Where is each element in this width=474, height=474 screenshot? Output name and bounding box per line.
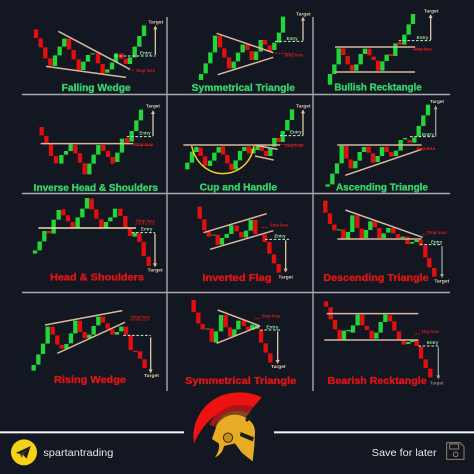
trend lines: rising wedge (45, 311, 125, 353)
target arrow: descending triangle: Target (434, 279, 450, 284)
target arrow: bearish rectangle: Stop loss (421, 329, 440, 334)
target arrow: rising wedge: Target (144, 373, 160, 378)
heading: bearish rectangle: Bearish Recktangle (328, 376, 427, 387)
target arrow: cup and handle: Entry (290, 129, 302, 134)
heading: rising wedge: Rising Wedge (54, 375, 126, 386)
target arrow: falling wedge (115, 19, 164, 73)
target arrow: bearish symmetrical triangle: Target (271, 364, 286, 369)
heading: inverse head and shoulders: Inverse Head & Shoulders (34, 183, 158, 194)
candles: inverted flag (200, 207, 279, 273)
candles: bearish symmetrical triangle (194, 300, 270, 363)
footer (0, 392, 474, 465)
target arrow: inverse head and shoulders (127, 104, 161, 147)
heading: falling wedge: Falling Wedge (62, 83, 131, 94)
target arrow: inverted flag: Stop loss (270, 223, 289, 228)
trend lines: ascending triangle (337, 145, 422, 175)
candles: rising wedge (34, 317, 145, 371)
target arrow: bullish rectangle: Entry (417, 35, 429, 40)
target arrow: inverse head and shoulders: Entry (139, 131, 151, 136)
target arrow: bearish symmetrical triangle (255, 313, 286, 369)
candles: inverse head and shoulders (42, 110, 141, 174)
account name: spartantrading (43, 448, 114, 459)
panel: bullish symmetrical triangle (192, 11, 311, 94)
candles: head and shoulders (35, 198, 149, 266)
trend lines: bearish rectangle (324, 314, 418, 340)
heading: head and shoulders: Head & Shoulders (50, 272, 144, 283)
panel: bearish symmetrical triangle (185, 300, 297, 387)
target arrow: cup and handle: Stop loss (285, 143, 304, 148)
target arrow: head and shoulders: Stop loss (136, 219, 156, 224)
candles: bearish rectangle (326, 301, 430, 377)
target arrow: bullish rectangle: Stop loss (414, 47, 432, 52)
heading: cup and handle: Cup and Handle (200, 183, 277, 194)
heading: bearish symmetrical triangle: Symmetrical Triangle (185, 376, 297, 387)
target arrow: ascending triangle: Entry (422, 132, 435, 137)
target arrow: inverted flag (262, 223, 294, 280)
panel: inverted flag (200, 207, 294, 284)
icon: floppy disk (447, 443, 464, 459)
target arrow: ascending triangle (410, 99, 445, 151)
target arrow: ascending triangle: Target (430, 99, 445, 104)
panel: cup and handle (183, 104, 311, 194)
trend lines: inverted flag (203, 214, 273, 249)
trend lines: bullish rectangle (335, 47, 415, 72)
neckline: inverse head and shoulders (41, 141, 133, 146)
target arrow: head and shoulders (132, 219, 163, 272)
footer rule right (274, 431, 474, 433)
candles: cup and handle (187, 109, 292, 170)
cup curve (192, 146, 254, 174)
heading: descending triangle: Descending Triangle (323, 273, 429, 284)
target arrow: bearish rectangle: Target (430, 381, 444, 386)
target arrow: descending triangle: Entry (431, 239, 443, 244)
target arrow: bearish symmetrical triangle: Stop loss (262, 313, 281, 318)
target arrow: falling wedge: Target (148, 19, 164, 24)
panel: bullish rectangle (330, 8, 439, 94)
panel: descending triangle (323, 201, 450, 284)
panel: rising wedge (34, 311, 160, 386)
target arrow: descending triangle: Stop loss (427, 230, 447, 235)
target arrow: bullish symmetrical triangle: Entry (287, 36, 298, 41)
target arrow: bullish rectangle: Target (424, 8, 439, 13)
heading: ascending triangle: Ascending Triangle (336, 183, 428, 194)
target arrow: bearish rectangle (415, 329, 444, 386)
target arrow: bullish symmetrical triangle: Target (296, 11, 311, 16)
candles: bullish symmetrical triangle (201, 17, 283, 80)
candles: bullish rectangle (330, 14, 413, 85)
target arrow: ascending triangle: Stop loss (417, 146, 436, 151)
target arrow: bullish rectangle (399, 8, 439, 52)
trend lines: bearish symmetrical triangle (217, 310, 260, 343)
heading: bullish rectangle: Bullish Recktangle (334, 83, 422, 94)
save for later label: Save for later (372, 448, 437, 459)
trend lines: bullish symmetrical triangle (217, 33, 273, 75)
trend lines: falling wedge (46, 31, 130, 77)
target arrow: falling wedge: Stop loss (136, 68, 156, 73)
target arrow: inverse head and shoulders: Target (146, 104, 161, 109)
heading: bullish symmetrical triangle: Symmetrical Triangle (192, 83, 295, 94)
heading: inverted flag: Inverted Flag (202, 273, 272, 284)
neckline: head and shoulders (38, 226, 136, 230)
resistance and handle lines (183, 145, 280, 160)
target arrow: cup and handle (280, 104, 311, 148)
panel: head and shoulders (35, 198, 163, 283)
panel: ascending triangle (328, 99, 445, 194)
target arrow: inverted flag: Entry (274, 233, 286, 238)
target arrow: bearish symmetrical triangle: Entry (266, 325, 279, 330)
icon: telegram badge (11, 439, 37, 465)
candles: falling wedge (36, 25, 144, 73)
panel: inverse head and shoulders (34, 104, 161, 194)
target arrow: head and shoulders: Entry (141, 227, 153, 232)
footer rule left (0, 431, 184, 433)
target arrow: cup and handle: Target (296, 104, 311, 109)
target arrow: descending triangle (420, 230, 450, 284)
target arrow: inverse head and shoulders: Stop loss (134, 142, 154, 147)
target arrow: rising wedge (123, 314, 160, 378)
logo: spartan helmet (193, 392, 262, 461)
candles: ascending triangle (328, 105, 428, 187)
target arrow: head and shoulders: Target (148, 267, 163, 272)
target arrow: rising wedge: Stop loss (131, 314, 151, 319)
candles: descending triangle (325, 201, 434, 277)
target arrow: bullish symmetrical triangle: Stop loss (284, 52, 304, 57)
target arrow: falling wedge: Entry (140, 50, 152, 55)
panel: falling wedge (36, 19, 164, 94)
target arrow: inverted flag: Target (278, 275, 294, 280)
trend lines: descending triangle (337, 210, 423, 239)
target arrow: bearish rectangle: Entry (427, 340, 439, 345)
panel: bearish rectangle (324, 301, 444, 387)
target arrow: bullish symmetrical triangle (275, 11, 311, 57)
